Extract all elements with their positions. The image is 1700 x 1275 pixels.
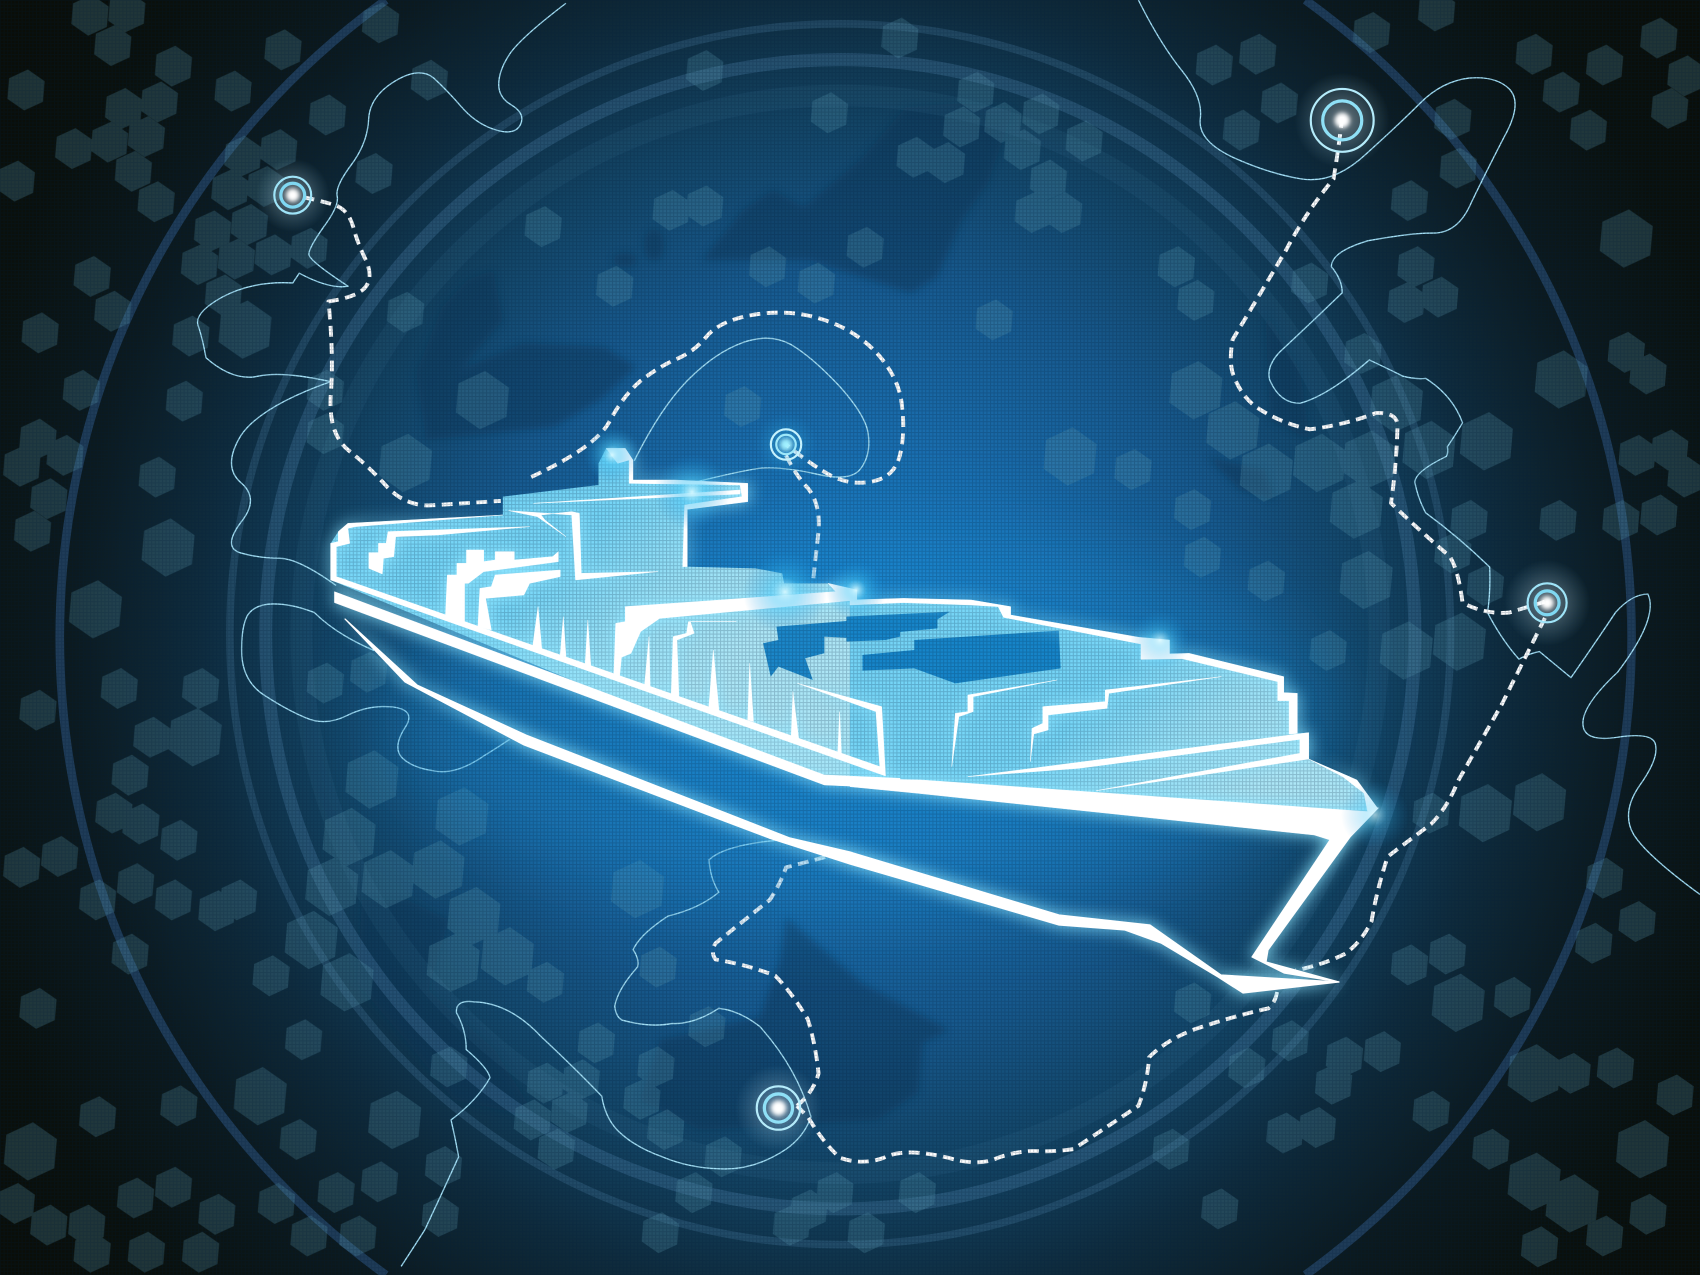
waypoint: bottom	[735, 1065, 822, 1151]
outlines: stern and mid section	[331, 448, 900, 788]
ship white outlines	[331, 448, 1378, 993]
waypoint: top left	[256, 158, 330, 232]
waypoint: right	[1504, 559, 1590, 646]
lower hull line	[345, 619, 1339, 993]
outlines: bow section	[850, 598, 1378, 840]
deck fill: stern and superstructure	[331, 448, 900, 788]
waypoint: center	[754, 412, 819, 477]
ship deck fill	[331, 448, 1378, 812]
deck fill: bow section	[850, 598, 1378, 812]
waypoint: top right	[1295, 73, 1390, 168]
light flares on ship	[584, 427, 1409, 849]
glow behind ship	[380, 530, 1340, 910]
bow stem	[1252, 808, 1378, 982]
route waypoints	[256, 73, 1590, 1151]
dashed shipping routes	[304, 117, 1545, 1162]
world map land masses	[357, 103, 1310, 1130]
dark container gaps	[763, 612, 1061, 683]
